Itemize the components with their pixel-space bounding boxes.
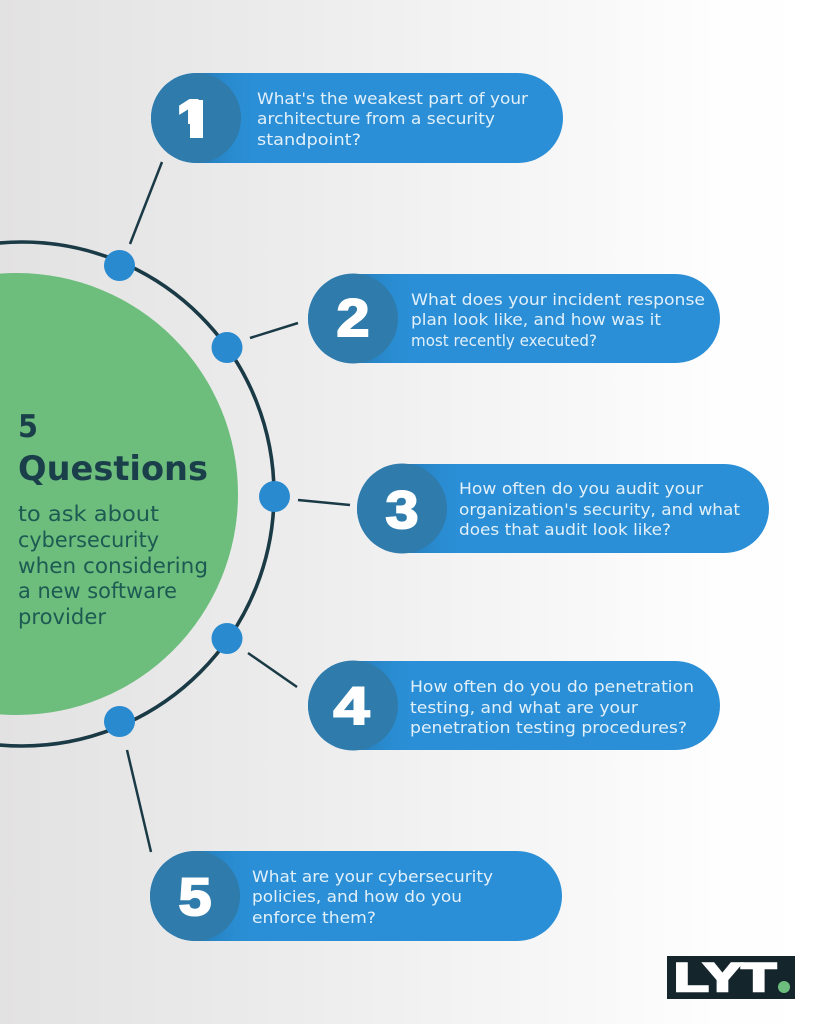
- question 1 pill: [151, 73, 563, 163]
- question 4 pill: 4: [334, 677, 370, 736]
- ring: [0, 242, 274, 746]
- question 4 pill: testing, and what are your: [410, 698, 638, 717]
- subheading: cybersecurity: [18, 528, 159, 552]
- logo: LYT: [674, 956, 776, 1000]
- question 3 pill: does that audit look like?: [459, 520, 671, 539]
- subheading: [18, 502, 208, 629]
- question 4 pill: [308, 660, 720, 750]
- heading: [18, 409, 208, 489]
- question 1 pill: architecture from a security: [257, 109, 495, 128]
- subheading: to ask about: [18, 502, 159, 526]
- green circle: [0, 273, 238, 715]
- question 4 pill: How often do you do penetration: [410, 677, 694, 696]
- question 5 pill: 5: [178, 868, 212, 927]
- question 3 pill: How often do you audit your: [459, 479, 703, 498]
- question 2 pill: What does your incident response: [411, 290, 705, 309]
- subheading: a new software: [18, 579, 177, 603]
- connectors and nodes: [104, 162, 350, 852]
- question 5 pill: What are your cybersecurity: [252, 867, 493, 886]
- question 5 pill: enforce them?: [252, 908, 376, 927]
- question 2 pill: most recently executed?: [411, 331, 597, 350]
- question 1 pill: What's the weakest part of your: [257, 89, 528, 108]
- question 2 pill: [308, 274, 720, 364]
- question 3 pill: 3: [386, 481, 418, 540]
- heading: Questions: [18, 449, 208, 489]
- question 1 pill: 1: [177, 90, 207, 149]
- question 2 pill: plan look like, and how was it: [411, 310, 661, 329]
- question 3 pill: organization's security, and what: [459, 500, 740, 519]
- question 5 pill: policies, and how do you: [252, 887, 462, 906]
- subheading: when considering: [18, 554, 208, 578]
- question 2 pill: 2: [336, 289, 370, 348]
- heading: 5: [18, 409, 38, 445]
- question 1 pill: standpoint?: [257, 130, 361, 149]
- question 4 pill: penetration testing procedures?: [410, 718, 687, 737]
- question 3 pill: [357, 464, 769, 554]
- subheading: provider: [18, 605, 106, 629]
- logo: [667, 956, 795, 1000]
- question 5 pill: [150, 851, 562, 941]
